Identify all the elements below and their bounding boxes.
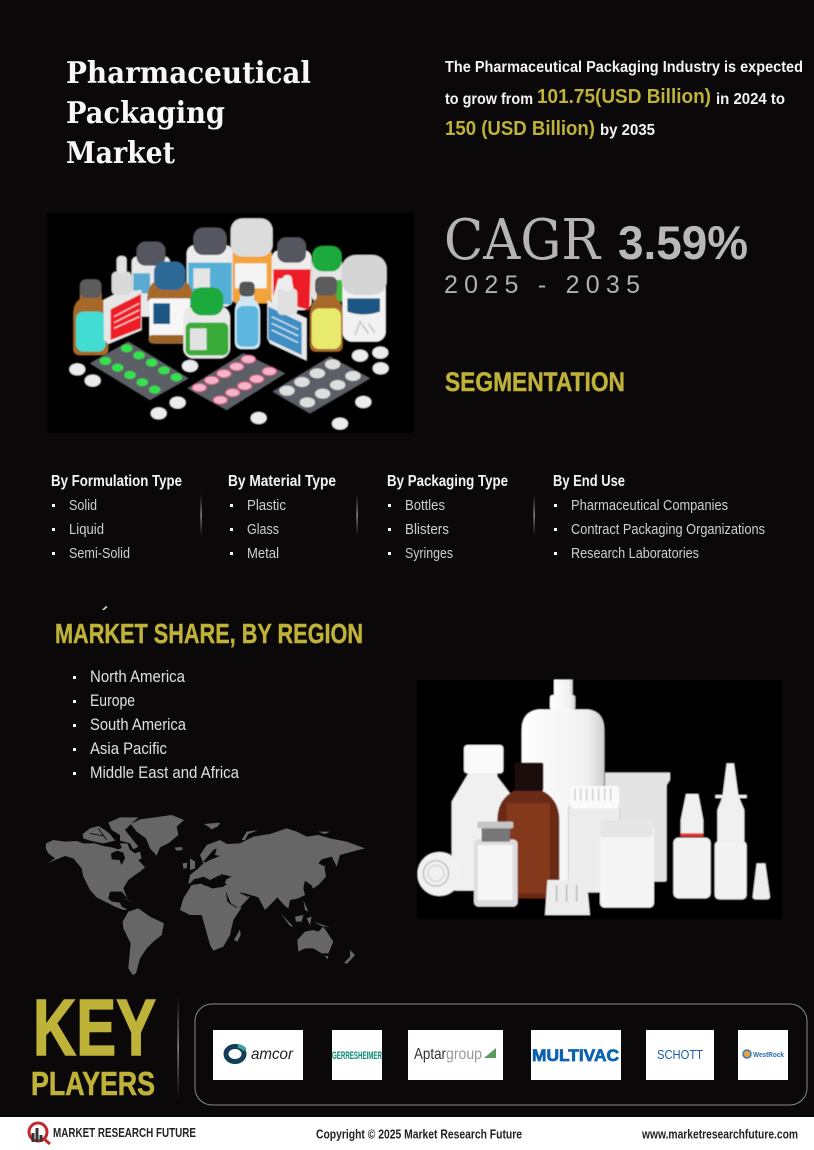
segment column: formulation type xyxy=(51,473,182,562)
segment column: packaging type: Bottles xyxy=(405,497,445,514)
market forecast text: 101.75(USD Billion) xyxy=(537,86,711,108)
logo: WestRock xyxy=(738,1030,788,1080)
title xyxy=(66,56,311,171)
CAGR figure: 3.59% xyxy=(618,216,748,269)
footer xyxy=(0,1117,814,1150)
segment column: end use: Research Laboratories xyxy=(571,545,699,562)
logo: Aptargroup xyxy=(408,1030,503,1080)
panel: key player logos xyxy=(195,1004,807,1105)
logo: Schott: SCHOTT xyxy=(657,1047,703,1062)
segment column: material type: Glass xyxy=(247,521,279,538)
title: Pharmaceutical xyxy=(66,56,311,91)
logo: Gerresheimer: GERRESHEIMER xyxy=(332,1050,382,1062)
segment column: end use: By End Use xyxy=(553,473,625,490)
title: Market xyxy=(66,136,175,171)
CAGR figure xyxy=(444,208,748,299)
market forecast text: in 2024 to xyxy=(716,91,785,108)
icon: green cap back bottle xyxy=(312,246,343,302)
segment column: material type xyxy=(228,473,336,562)
icon: back bottle with dark cap xyxy=(132,242,170,317)
icon: yellow vial xyxy=(310,277,343,352)
logo: market research future xyxy=(29,1123,50,1144)
segment column: formulation type: Solid xyxy=(69,497,97,514)
segment column: end use: Pharmaceutical Companies xyxy=(571,497,728,514)
market forecast text xyxy=(445,59,803,140)
CAGR figure: CAGR xyxy=(444,208,602,273)
illustration: medicine bottles and blister packs xyxy=(47,213,414,433)
icon: loose pills xyxy=(69,347,389,430)
key players heading: KEY xyxy=(33,983,156,1072)
icon: white blister pack xyxy=(273,357,370,413)
world map xyxy=(46,815,365,975)
icon: red label bottle xyxy=(272,237,312,310)
region list: Asia Pacific xyxy=(90,740,167,758)
logo: Aptargroup: group xyxy=(446,1046,482,1063)
icon: teal vial xyxy=(73,279,108,355)
illustration: white packaging bottles xyxy=(417,679,782,919)
icon: amber bottle xyxy=(497,763,559,898)
title: Packaging xyxy=(66,96,225,131)
logo: amcor xyxy=(213,1030,303,1080)
segment column: material type: Metal xyxy=(247,545,279,562)
icon: brown shoulder bottle with blue cap xyxy=(147,262,193,343)
key players heading: PLAYERS xyxy=(31,1065,155,1102)
icon: flip cap xyxy=(417,852,461,896)
icon: green label bottle xyxy=(183,287,230,358)
footer: Copyright © 2025 Market Research Future xyxy=(316,1126,522,1142)
segment column: end use xyxy=(553,473,765,562)
icon: large blue label bottle xyxy=(187,228,233,307)
logo: WestRock: WestRock xyxy=(753,1052,784,1059)
region list: Europe xyxy=(90,692,135,710)
icon: ribbed cap jar xyxy=(568,786,620,892)
market forecast text: 150 (USD Billion) xyxy=(445,118,595,140)
market share heading: MARKET SHARE, BY REGION xyxy=(55,618,363,649)
icon: orange bottle with white cap xyxy=(231,218,273,303)
logo: Gerresheimer xyxy=(332,1030,382,1080)
region list xyxy=(73,668,240,782)
icon: screw cap xyxy=(545,880,590,915)
icon: dropper bottle with red band xyxy=(673,794,711,898)
segmentation heading: SEGMENTATION xyxy=(445,367,625,397)
segment column: formulation type: By Formulation Type xyxy=(51,473,182,490)
logo: amcor: amcor xyxy=(251,1046,294,1063)
icon: white round container xyxy=(600,821,654,908)
market forecast text: to grow from xyxy=(445,91,533,108)
icon: flip-top container xyxy=(605,773,670,882)
footer: MARKET RESEARCH FUTURE xyxy=(53,1126,196,1140)
icon: blue label dropper xyxy=(267,275,307,361)
icon: white shouldered bottle xyxy=(452,745,510,891)
segment column: packaging type: Blisters xyxy=(405,521,449,538)
icon: white bottle right xyxy=(342,255,387,342)
logo: Schott xyxy=(646,1030,714,1080)
icon: large white bottle xyxy=(522,679,604,887)
key players heading xyxy=(31,983,156,1102)
segment column: formulation type: Semi-Solid xyxy=(69,545,130,562)
segment column: formulation type: Liquid xyxy=(69,521,104,538)
icon: red dropper bottle xyxy=(103,256,142,344)
logo: Aptargroup: Aptar xyxy=(414,1046,447,1063)
segment column: end use: Contract Packaging Organizations xyxy=(571,521,765,538)
icon: nozzle cap xyxy=(753,863,770,899)
region list: South America xyxy=(90,716,187,734)
icon: blue vial xyxy=(235,282,260,349)
icon: pink blister pack xyxy=(188,353,285,410)
icon: nasal spray bottle xyxy=(715,763,747,899)
segment column: packaging type: Syringes xyxy=(405,545,453,562)
segment column: material type: By Material Type xyxy=(228,473,336,490)
CAGR figure: 2025 - 2035 xyxy=(444,271,640,299)
icon: green blister pack xyxy=(90,342,188,400)
region list: North America xyxy=(90,668,186,686)
segment column: packaging type xyxy=(387,473,508,562)
icon: glass vial xyxy=(474,822,518,907)
region list: Middle East and Africa xyxy=(90,764,240,782)
logo: Multivac xyxy=(531,1030,621,1080)
market forecast text: by 2035 xyxy=(600,122,655,139)
logo: Multivac: MULTIVAC xyxy=(532,1046,619,1065)
segment column: material type: Plastic xyxy=(247,497,286,514)
segment column: packaging type: By Packaging Type xyxy=(387,473,508,490)
